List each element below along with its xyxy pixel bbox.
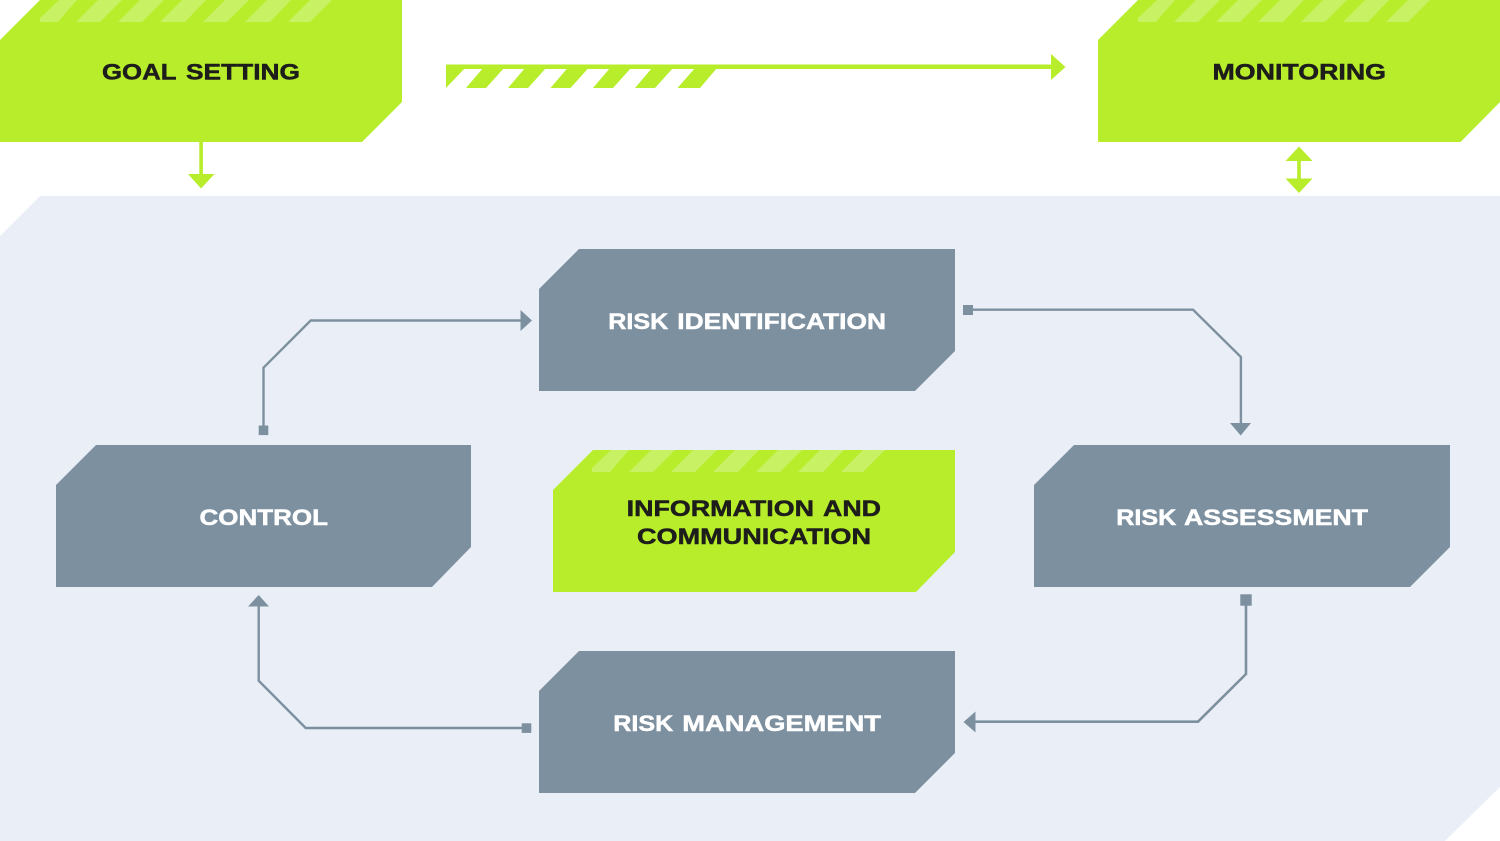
box: information and communication: COMMUNICATION xyxy=(637,524,871,549)
arrow: control to risk identification xyxy=(259,310,532,435)
box: goal setting: SETTING xyxy=(186,60,300,84)
box: information and communication: AND xyxy=(823,496,881,521)
background panel xyxy=(0,196,1500,841)
box: information and communication xyxy=(553,450,955,592)
arrow: striped progress from goal setting to monitoring xyxy=(446,54,1066,88)
box: risk management xyxy=(539,651,955,793)
box: control xyxy=(56,445,471,587)
arrow: risk management to control xyxy=(248,595,531,733)
box: monitoring xyxy=(1098,0,1500,142)
arrow: risk identification to risk assessment xyxy=(963,305,1251,436)
box: goal setting: GOAL xyxy=(102,60,177,84)
box: monitoring: MONITORING xyxy=(1212,60,1386,84)
box: risk management: RISK xyxy=(613,711,674,736)
arrow: risk assessment to risk management xyxy=(964,594,1252,732)
box: risk identification: IDENTIFICATION xyxy=(677,309,886,334)
box: control: CONTROL xyxy=(200,505,328,530)
arrow: monitoring two-way link xyxy=(1286,146,1312,193)
box: risk assessment: RISK xyxy=(1116,505,1177,530)
box: risk identification xyxy=(539,249,955,391)
box: risk assessment: ASSESSMENT xyxy=(1184,505,1368,530)
box: risk assessment xyxy=(1034,445,1450,587)
box: risk management: MANAGEMENT xyxy=(682,711,881,736)
box: risk identification: RISK xyxy=(608,309,669,334)
arrow: goal setting down to process xyxy=(188,142,214,188)
box: goal setting xyxy=(0,0,402,142)
box: information and communication: INFORMATION xyxy=(627,496,814,521)
